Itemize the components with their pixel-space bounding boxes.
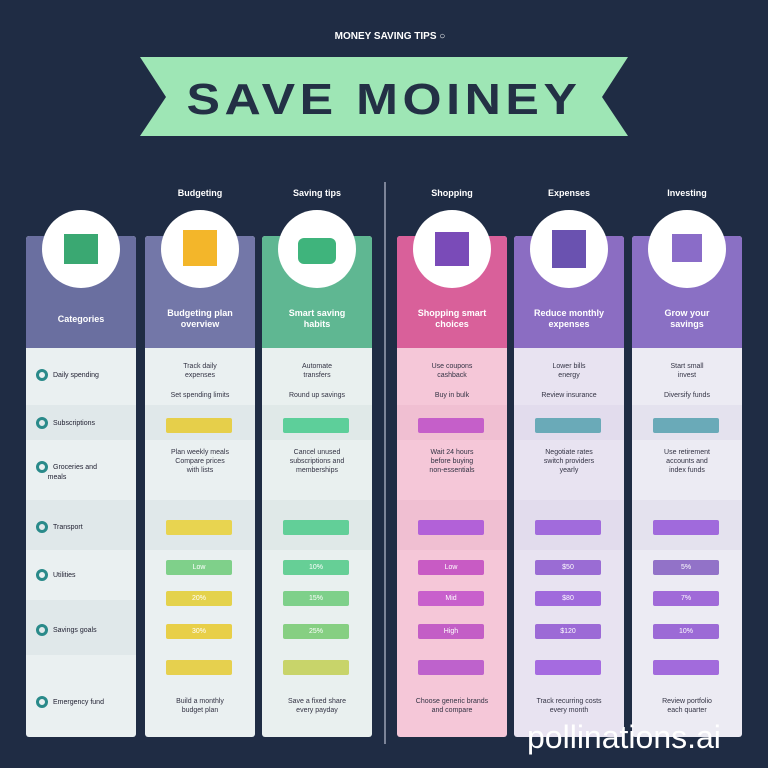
panel: expenses: $80	[562, 595, 574, 602]
watermark: pollinations.ai	[527, 719, 721, 755]
panel: investing: Start small	[670, 363, 704, 370]
panel: budgeting: Budgeting plan	[167, 308, 233, 318]
panel: saving tips: habits	[304, 319, 330, 329]
column headings: Investing	[667, 188, 707, 198]
panel: shopping: Shopping smart	[418, 308, 486, 318]
panel: expenses: every month	[550, 707, 588, 714]
panel: investing: Grow your	[664, 308, 710, 318]
panel: budgeting: 30%	[192, 628, 206, 635]
subtitle: MONEY SAVING TIPS ○	[335, 31, 445, 42]
panel: expenses: Reduce monthly	[534, 308, 604, 318]
panel: shopping: non-essentials	[429, 467, 475, 474]
icon: cart	[413, 210, 491, 288]
panel: budgeting: expenses	[185, 372, 215, 379]
divider	[384, 182, 386, 744]
panel: expenses: Negotiate rates	[545, 449, 593, 456]
panel: investing	[632, 236, 742, 737]
panel: expenses: expenses	[548, 319, 590, 329]
panel: categories	[26, 236, 136, 737]
column headings: Shopping	[431, 188, 473, 198]
panel: shopping: before buying	[431, 458, 473, 465]
panel: budgeting: 20%	[192, 595, 206, 602]
panel: expenses: yearly	[560, 467, 578, 474]
panel: investing: savings	[670, 319, 704, 329]
panel: categories: Transport	[53, 524, 83, 531]
panel: categories: Emergency fund	[53, 699, 104, 706]
panel: budgeting: Low	[193, 564, 205, 571]
column headings: Expenses	[548, 188, 590, 198]
panel: shopping: Use coupons	[432, 363, 472, 370]
panel: saving tips	[262, 236, 372, 737]
panel: saving tips: 25%	[309, 628, 323, 635]
panel: shopping: Buy in bulk	[435, 392, 469, 399]
panel: expenses: Track recurring costs	[536, 698, 602, 705]
panel: investing: Use retirement	[664, 449, 710, 456]
icon: house	[42, 210, 120, 288]
panel: saving tips: Round up savings	[289, 392, 345, 399]
panel: shopping: Choose generic brands	[416, 698, 488, 705]
panel: budgeting	[145, 236, 255, 737]
panel: shopping: choices	[435, 319, 469, 329]
panel: saving tips: Save a fixed share	[288, 698, 346, 705]
panel: shopping: Low	[445, 564, 457, 571]
panel: expenses	[514, 236, 624, 737]
icon: shirt	[530, 210, 608, 288]
panel: saving tips: memberships	[296, 467, 338, 474]
panel: saving tips: every payday	[296, 707, 338, 714]
panel: categories: Groceries and	[53, 464, 97, 471]
panel: saving tips: 10%	[309, 564, 323, 571]
panel: categories: Daily spending	[53, 372, 99, 379]
panel: investing: Review portfolio	[662, 698, 712, 705]
column headings	[178, 188, 707, 198]
panel: budgeting: overview	[181, 319, 219, 329]
panel: shopping: Mid	[445, 595, 457, 602]
panel: expenses: $120	[560, 628, 576, 635]
panel: investing: accounts and	[666, 458, 708, 465]
icon: chart	[648, 210, 726, 288]
panel: budgeting: Set spending limits	[171, 392, 229, 399]
panel: budgeting: Plan weekly meals	[171, 449, 229, 456]
panel: saving tips: transfers	[303, 372, 331, 379]
panel: shopping: cashback	[437, 372, 467, 379]
icon: piggy bank	[278, 210, 356, 288]
icon: wallet	[161, 210, 239, 288]
panel: shopping	[397, 236, 507, 737]
panel: expenses: switch providers	[544, 458, 594, 465]
column headings: Saving tips	[293, 188, 341, 198]
panel: saving tips: Smart saving	[289, 308, 345, 318]
panel: investing: Diversify funds	[664, 392, 710, 399]
panel: investing: invest	[678, 372, 696, 379]
panel: expenses: $50	[562, 564, 574, 571]
panel: investing: 10%	[679, 628, 693, 635]
panel: investing: 5%	[681, 564, 691, 571]
panel: saving tips: Automate	[302, 363, 332, 370]
panel: budgeting: Compare prices	[175, 458, 225, 465]
panel: expenses: Lower bills	[552, 363, 586, 370]
panel: saving tips: Cancel unused	[294, 449, 340, 456]
panel: shopping: High	[444, 628, 458, 635]
panel: expenses: Review insurance	[541, 392, 597, 399]
panel: budgeting: Track daily	[183, 363, 217, 370]
panel: shopping: Wait 24 hours	[431, 449, 473, 456]
panel: investing: index funds	[669, 467, 705, 474]
panel: categories: Utilities	[53, 572, 76, 579]
column headings: Budgeting	[178, 188, 222, 198]
title banner	[140, 57, 628, 136]
title banner: SAVE MOINEY	[186, 75, 582, 124]
panel: saving tips: 15%	[309, 595, 323, 602]
panel: shopping: and compare	[432, 707, 472, 714]
panel: investing: 7%	[681, 595, 691, 602]
panel: categories: meals	[48, 474, 66, 481]
panel: saving tips: subscriptions and	[290, 458, 344, 465]
panel: budgeting: with lists	[187, 467, 213, 474]
panel: budgeting: budget plan	[182, 707, 218, 714]
panel: categories: Savings goals	[53, 627, 97, 634]
panel: categories: Categories	[58, 314, 104, 324]
panel: categories: Subscriptions	[53, 420, 95, 427]
panel: investing: each quarter	[667, 707, 707, 714]
panel: budgeting: Build a monthly	[176, 698, 224, 705]
panel: expenses: energy	[558, 372, 580, 379]
